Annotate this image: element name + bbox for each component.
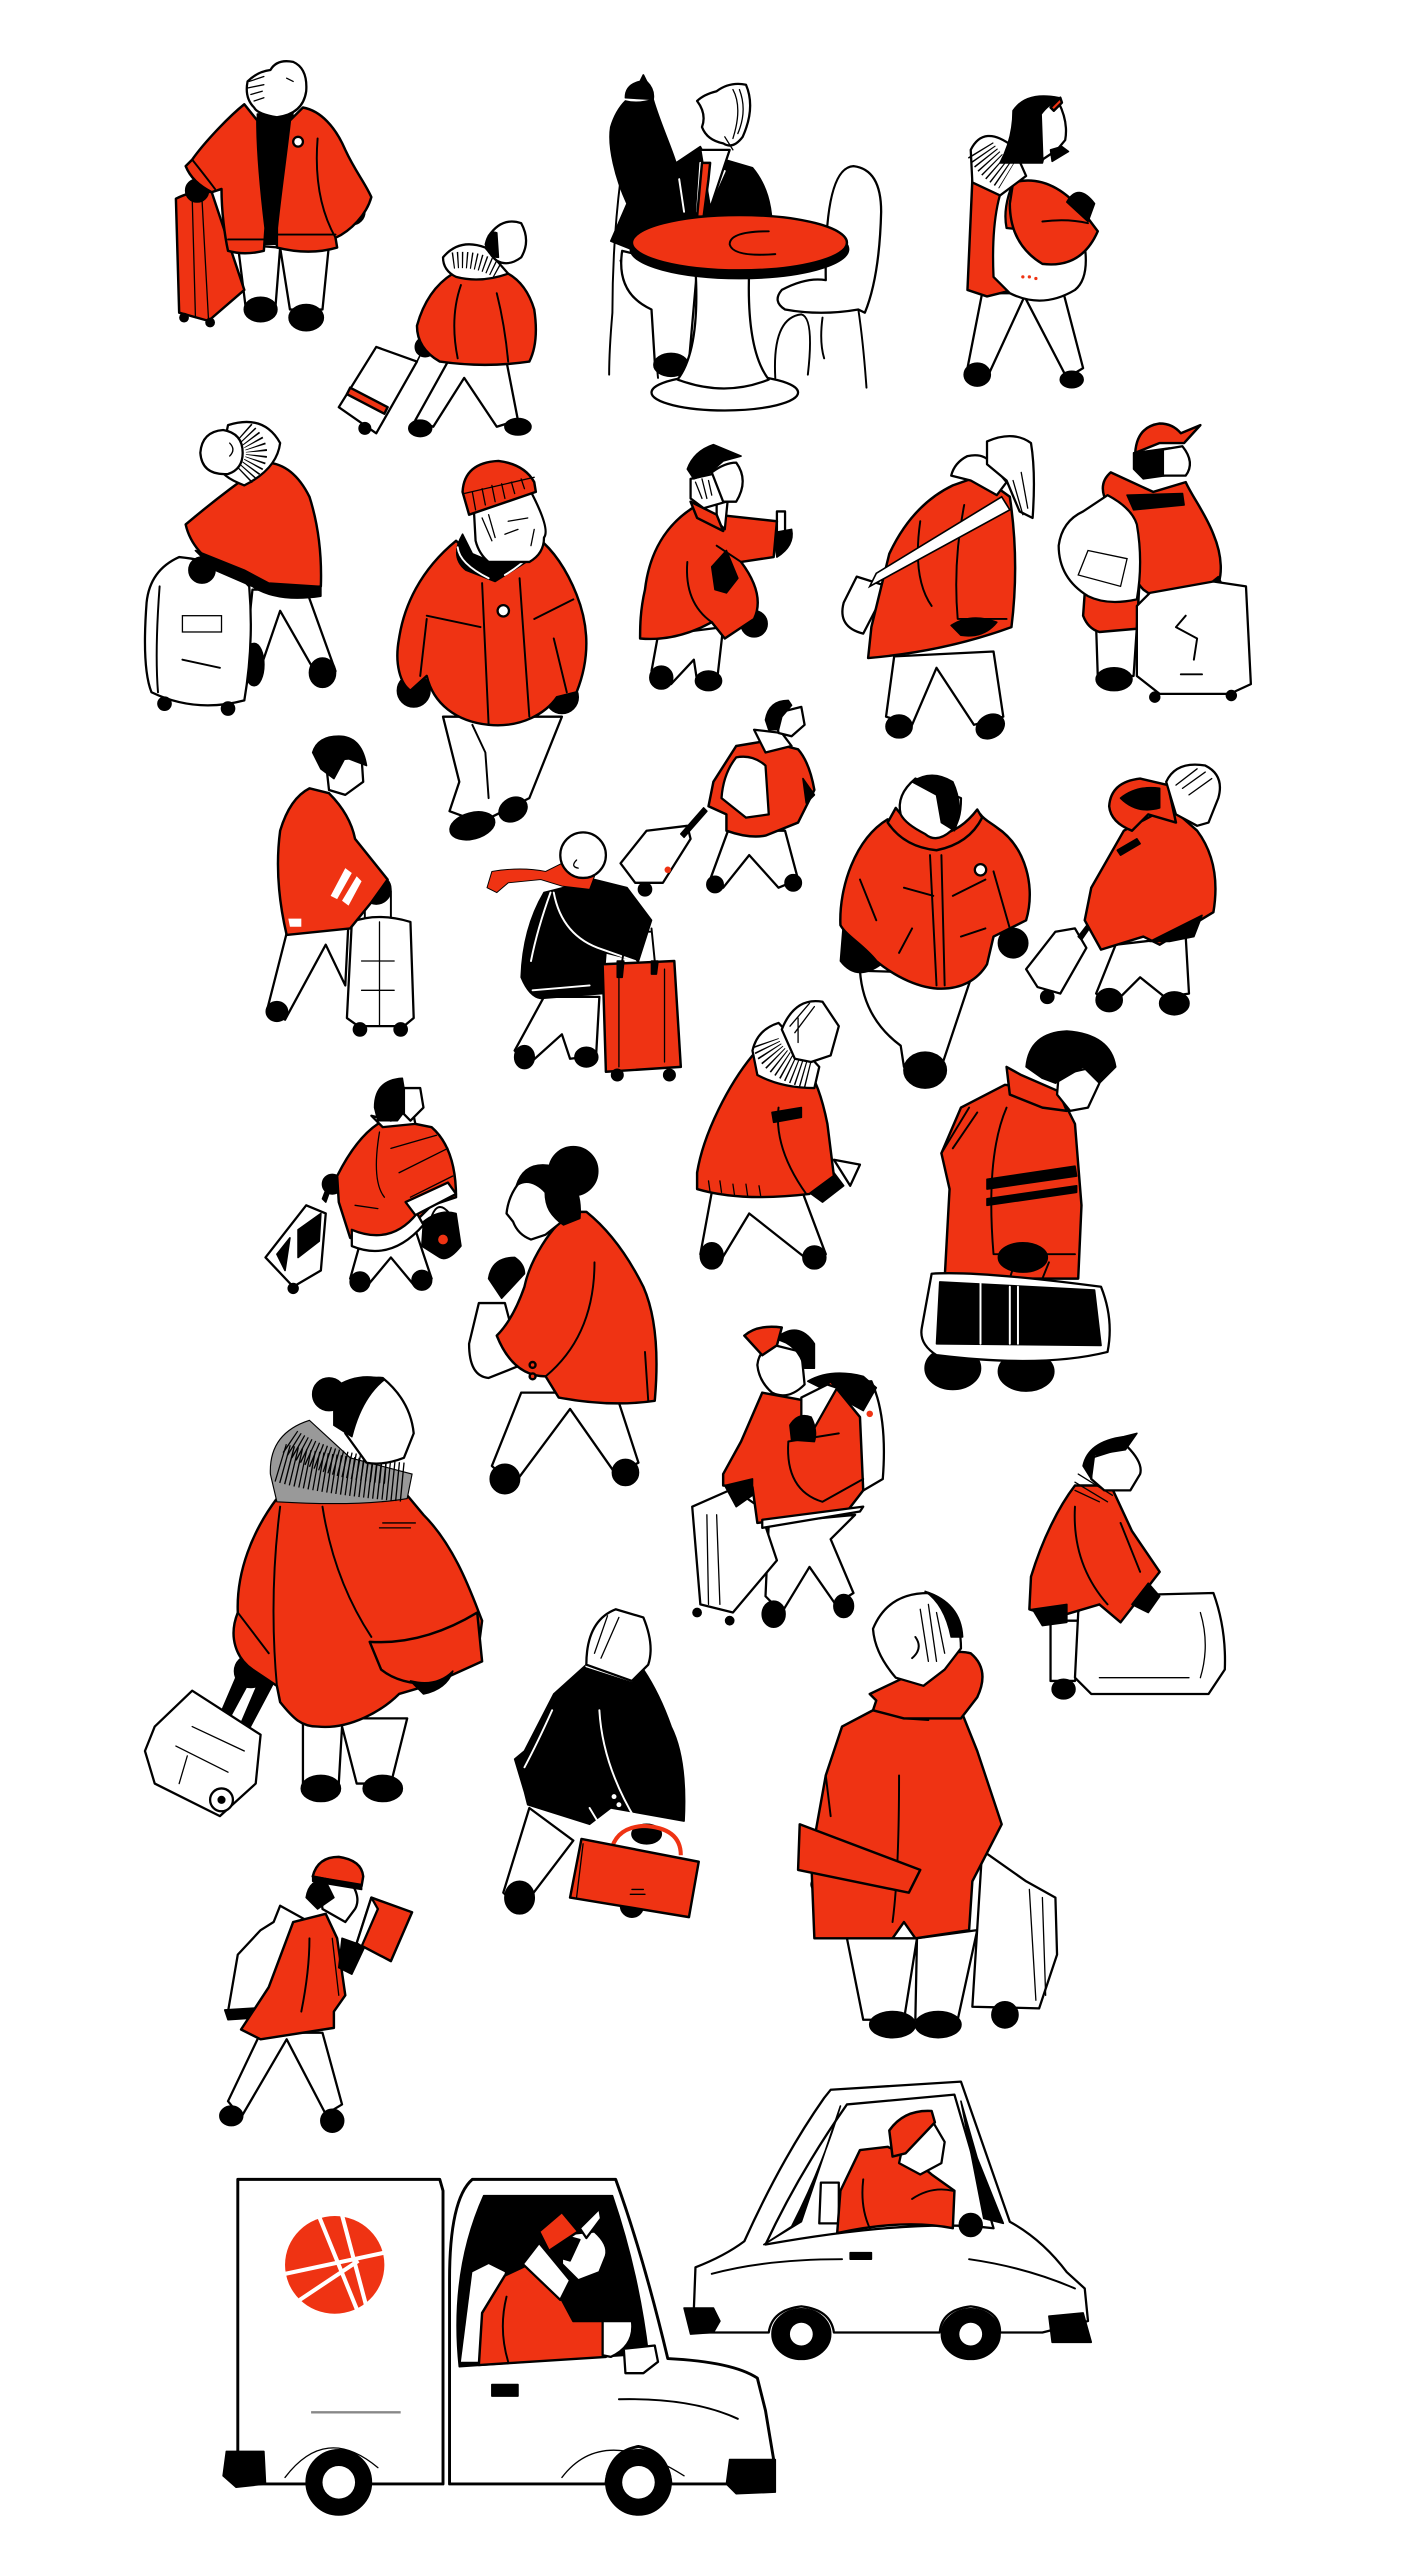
legs xyxy=(303,1718,407,1784)
body xyxy=(1103,472,1221,602)
collar hair face xyxy=(371,1108,415,1127)
red suitcase xyxy=(176,191,244,321)
right chair xyxy=(778,166,881,313)
hair and face xyxy=(326,757,363,795)
white suitcase xyxy=(347,917,414,1026)
steering wheel xyxy=(959,2214,982,2236)
figure: black coat traveller with red scarf and red suitcase xyxy=(487,832,681,1081)
legs xyxy=(886,652,1003,725)
briefcase handle xyxy=(611,1826,681,1855)
figure: black-hat traveller holding ticket xyxy=(640,445,792,691)
figure: woman with headband and shoulder bag xyxy=(964,96,1098,388)
legs xyxy=(350,1230,432,1287)
head xyxy=(586,1609,651,1681)
book xyxy=(357,1898,412,1961)
logo xyxy=(285,2215,384,2314)
driver collar and face xyxy=(523,2243,570,2300)
figure: blonde traveller from behind with cross-body bag xyxy=(842,436,1034,744)
white glove xyxy=(603,2321,632,2357)
legs xyxy=(710,831,798,888)
legs xyxy=(766,1515,855,1613)
seat belt xyxy=(461,2264,505,2362)
head xyxy=(200,430,243,474)
wheels xyxy=(306,2450,371,2515)
figure: beanie man in big puffer jacket xyxy=(397,461,586,844)
case xyxy=(265,1205,326,1287)
red jacket xyxy=(417,269,536,365)
fur hood xyxy=(220,422,280,485)
head xyxy=(1091,1446,1141,1490)
red table top xyxy=(630,220,849,279)
red cap xyxy=(1135,423,1200,453)
bumpers xyxy=(223,2451,265,2487)
hair with bun xyxy=(313,1378,345,1411)
figure: man in black coat with red briefcase xyxy=(503,1609,699,1917)
legs xyxy=(1096,937,1189,1007)
delivery truck with driver in red cap xyxy=(223,2179,775,2515)
figure: woman with hair bun and white handbag xyxy=(469,1147,656,1494)
hand xyxy=(834,1160,860,1186)
red coat xyxy=(697,1055,834,1197)
pedestal and base xyxy=(651,375,798,410)
white case xyxy=(621,826,691,883)
fur collar xyxy=(971,136,1026,195)
gloves xyxy=(397,674,430,707)
suitcase xyxy=(692,1489,777,1613)
head xyxy=(247,61,306,117)
left chair xyxy=(609,179,658,378)
cuff xyxy=(798,1824,920,1893)
hair and face xyxy=(1000,96,1059,163)
glove xyxy=(339,1938,365,1974)
face xyxy=(507,1181,562,1240)
gloves xyxy=(840,920,881,972)
driver coat xyxy=(479,2264,606,2365)
legs xyxy=(503,1808,573,1909)
handbag xyxy=(469,1303,521,1378)
body lines xyxy=(712,2259,1075,2289)
raised hand xyxy=(625,75,653,99)
red coat xyxy=(278,788,388,935)
white suitcase xyxy=(145,557,251,705)
backpack xyxy=(1059,495,1140,602)
small case xyxy=(1026,928,1086,994)
figure: cap man with backpack and white suitcase xyxy=(692,1327,884,1627)
suitcase xyxy=(339,347,417,433)
figure: large red coat traveller seen from behind xyxy=(798,1591,1057,2038)
figure: hooded traveller with small case xyxy=(1026,765,1220,1015)
red coat xyxy=(497,1212,656,1403)
legs xyxy=(967,293,1083,378)
hood xyxy=(951,455,1007,495)
handle xyxy=(365,891,391,920)
figure: man in black suit at red cafe table xyxy=(609,75,881,410)
jacket xyxy=(840,814,1030,989)
legs xyxy=(443,717,562,823)
head with hair xyxy=(782,1001,839,1062)
red coat xyxy=(868,476,1015,658)
coat back xyxy=(967,179,1018,296)
glove xyxy=(998,1243,1047,1272)
figure: large puffer jacket traveller seen from front xyxy=(840,775,1030,1088)
cab xyxy=(450,2179,774,2484)
hood and face xyxy=(754,730,792,753)
bumpers xyxy=(684,2308,720,2334)
gloves xyxy=(774,529,792,557)
driver coat xyxy=(837,2147,954,2233)
suitcase xyxy=(215,1670,274,1738)
suitcase xyxy=(972,1850,1057,2008)
figure: beanie traveller reading a red book xyxy=(220,1857,412,2132)
red briefcase xyxy=(570,1839,699,1917)
red coat xyxy=(186,104,265,253)
fur collar xyxy=(443,244,508,280)
mirror xyxy=(624,2346,658,2373)
cuff xyxy=(370,1613,482,1684)
legs xyxy=(492,1393,638,1485)
hair xyxy=(912,775,959,831)
fur hem and cuff xyxy=(352,1213,423,1251)
red cap xyxy=(539,2212,578,2251)
backpack xyxy=(228,1906,309,2013)
bun xyxy=(549,1147,598,1196)
car body xyxy=(694,2082,1088,2332)
figure: traveller with white fur collar seen from side xyxy=(697,1001,860,1269)
red coat xyxy=(1085,806,1215,950)
shirt and tie xyxy=(700,150,730,208)
wheels xyxy=(772,2309,831,2359)
white strap xyxy=(870,497,1010,586)
figure: traveller with fur hood leaning on white suitcase xyxy=(145,422,336,715)
window xyxy=(766,2095,994,2245)
ticket xyxy=(777,511,785,539)
fur collar xyxy=(752,1023,819,1088)
legs xyxy=(244,590,336,671)
black duffel bag xyxy=(1010,1254,1049,1279)
legs xyxy=(415,362,518,427)
figure: small traveller with white fur trim and patterned case xyxy=(265,1078,461,1293)
grey line xyxy=(311,2411,401,2413)
legs xyxy=(515,997,599,1064)
face xyxy=(474,492,546,562)
collar xyxy=(1075,1474,1112,1502)
collar xyxy=(1007,1067,1067,1111)
red coat xyxy=(811,1710,1002,1938)
legs xyxy=(700,1189,826,1267)
face xyxy=(757,1345,805,1395)
red beanie xyxy=(313,1857,363,1886)
car with driver in red beanie xyxy=(684,2082,1091,2359)
leg xyxy=(1051,1621,1088,1681)
hair and face xyxy=(691,472,726,508)
legs xyxy=(860,971,972,1067)
suitcase xyxy=(1075,1593,1225,1694)
legs xyxy=(621,251,697,362)
blonde hair xyxy=(987,436,1034,518)
gloves xyxy=(725,1479,752,1507)
red jacket xyxy=(186,463,321,589)
black hand xyxy=(235,1655,267,1687)
glove xyxy=(811,1870,883,1899)
red coat xyxy=(1029,1485,1160,1622)
figure: red cap traveller with backpack sitting on suitcase xyxy=(1059,423,1251,702)
red coat xyxy=(337,1121,456,1246)
legs xyxy=(228,2033,342,2117)
legs xyxy=(847,1930,977,2020)
black coat xyxy=(515,1665,685,1824)
cap dome xyxy=(775,1330,814,1368)
scarf xyxy=(487,863,594,893)
handbag xyxy=(422,1212,461,1259)
feet xyxy=(925,1347,980,1389)
hair and face xyxy=(1134,448,1169,479)
beanie xyxy=(889,2111,935,2157)
figure: dark-haired man with striped red coat and black duffel xyxy=(921,1031,1116,1391)
red beanie xyxy=(463,461,536,515)
figure: large woman in red coat with grey fur collar xyxy=(145,1377,482,1816)
sleeve xyxy=(1010,180,1098,264)
backpack xyxy=(722,757,769,818)
collar xyxy=(888,808,982,850)
face xyxy=(1057,1067,1099,1111)
black coat xyxy=(521,880,651,998)
cargo box xyxy=(238,2179,443,2484)
cap bill xyxy=(744,1327,782,1355)
figure: side view traveller with white roller suitcase xyxy=(266,736,414,1036)
face xyxy=(900,779,961,838)
red coat xyxy=(708,741,814,837)
red coat xyxy=(640,508,777,639)
head xyxy=(560,832,606,878)
suitcase xyxy=(1137,581,1251,694)
black suit xyxy=(610,99,772,257)
shoulder bag xyxy=(842,577,888,634)
face xyxy=(319,1881,357,1922)
red coat xyxy=(234,1495,482,1727)
puffer jacket xyxy=(397,538,586,725)
legs xyxy=(267,920,349,1020)
red coat xyxy=(941,1085,1081,1279)
collar xyxy=(717,497,728,529)
hair xyxy=(1026,1031,1116,1083)
inner shirt xyxy=(257,111,293,244)
pocket xyxy=(712,551,738,593)
glove xyxy=(489,1257,524,1298)
hat xyxy=(687,445,741,479)
hair xyxy=(516,1165,580,1225)
head xyxy=(488,222,526,263)
collar xyxy=(870,1652,982,1718)
collar xyxy=(457,531,541,581)
door handle and hood line xyxy=(492,2385,518,2396)
hood xyxy=(1109,779,1176,831)
black pillars xyxy=(764,2106,840,2245)
red suitcase xyxy=(622,928,655,961)
red jacket xyxy=(723,1381,863,1523)
shoulder bag xyxy=(993,171,1086,301)
driver head xyxy=(899,2114,945,2174)
figure: small flat-cap traveller with white suitcase xyxy=(1029,1433,1225,1699)
cap xyxy=(1083,1433,1137,1479)
head xyxy=(697,84,750,146)
legs xyxy=(651,627,723,684)
black window xyxy=(457,2196,648,2367)
figure: old man with red suitcase xyxy=(176,61,371,331)
head xyxy=(873,1593,961,1686)
head xyxy=(1166,765,1220,826)
fur collar xyxy=(270,1420,412,1504)
backpack xyxy=(823,1381,884,1495)
glove xyxy=(632,1824,661,1844)
figure: small walker with strapped suitcase xyxy=(339,222,536,437)
seat xyxy=(819,2183,839,2223)
leg xyxy=(1096,627,1137,676)
figure: small walker with backpack and white case xyxy=(621,700,814,896)
red coat xyxy=(241,1914,345,2039)
face xyxy=(345,1378,414,1464)
lower coat xyxy=(1083,570,1140,632)
legs xyxy=(238,244,329,309)
